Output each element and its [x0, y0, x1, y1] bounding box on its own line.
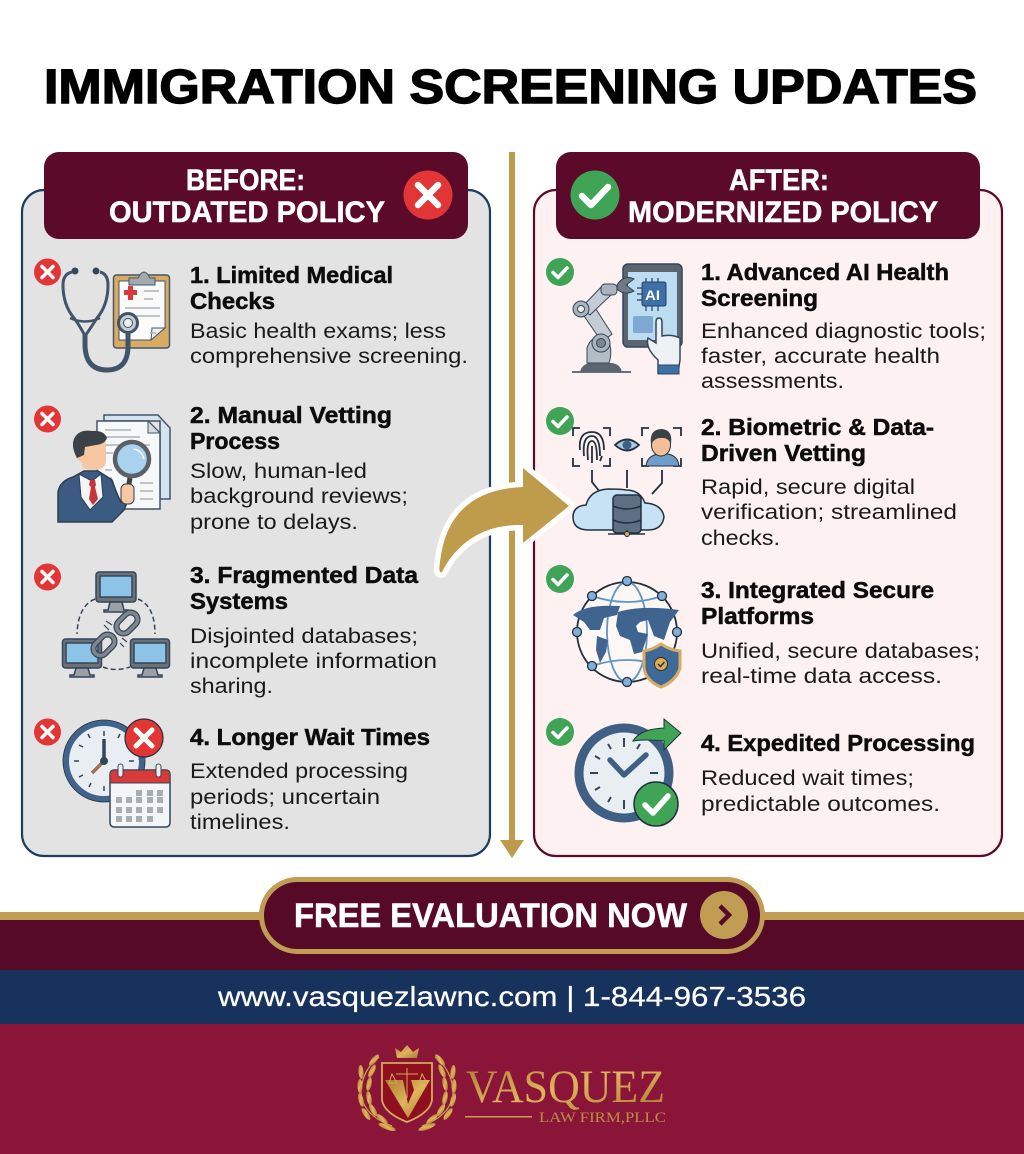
item 4: expedited processing [546, 718, 975, 826]
item 3: integrated secure platforms: real-time data access. [701, 664, 942, 688]
item 2: manual vetting process: 2. Manual Vetting [190, 402, 392, 428]
item 2: manual vetting process: prone to delays. [190, 510, 358, 534]
item 2: biometric and data-driven vetting: verification; streamlined [701, 500, 957, 524]
item 1: advanced ai health screening [546, 258, 986, 393]
item 3: fragmented data systems: sharing. [190, 674, 273, 698]
item 3: integrated secure platforms: Unified, secure databases; [701, 639, 980, 663]
item 3: fragmented data systems: incomplete information [190, 649, 437, 673]
item 4: expedited processing: predictable outcomes. [701, 792, 940, 816]
arrow: curved gold transition arrow [439, 468, 569, 572]
before header banner [44, 152, 468, 239]
item 1: limited medical checks: comprehensive screening. [190, 344, 468, 368]
after header banner [556, 152, 980, 239]
item 1: advanced ai health screening: Screening [701, 285, 818, 311]
item 1: advanced ai health screening: Enhanced diagnostic tools; [701, 319, 986, 343]
item 4: longer wait times: Extended processing [190, 759, 408, 783]
icon: disconnected computers and broken link [62, 572, 170, 677]
item 3: integrated secure platforms: 3. Integrated Secure [701, 577, 934, 603]
item 2: biometric and data-driven vetting: checks. [701, 526, 780, 550]
logo: vasquez law firm: VASQUEZ [466, 1061, 665, 1113]
before header banner: BEFORE: [186, 164, 305, 197]
item 1: limited medical checks: Checks [190, 288, 275, 314]
item 4: longer wait times [34, 718, 430, 834]
item 2: manual vetting process: Process [190, 428, 280, 454]
item 2: biometric and data-driven vetting: 2. Biometric & Data- [701, 414, 934, 440]
check badge [546, 718, 574, 746]
item 1: advanced ai health screening: 1. Advanced AI Health [701, 259, 949, 285]
item 3: fragmented data systems [34, 562, 437, 698]
check badge [546, 407, 574, 435]
contact bar [0, 970, 1024, 1024]
item 1: advanced ai health screening: faster, accurate health [701, 344, 940, 368]
item 3: fragmented data systems: Systems [190, 588, 288, 614]
icon: robot arm with ai tablet [572, 264, 682, 374]
item 2: biometric and data-driven vetting: Rapid, secure digital [701, 475, 915, 499]
x badge [34, 258, 61, 286]
item 3: fragmented data systems: 3. Fragmented Data [190, 562, 418, 588]
item 4: longer wait times: 4. Longer Wait Times [190, 724, 430, 750]
button: free evaluation now: FREE EVALUATION NOW [294, 897, 688, 935]
item 4: expedited processing: 4. Expedited Processing [701, 730, 975, 756]
item 1: limited medical checks [34, 258, 468, 370]
icon: fingerprint, eye, face and cloud database [573, 428, 681, 537]
icon: clock with arrow and check [579, 719, 681, 826]
item 3: integrated secure platforms: Platforms [701, 603, 814, 629]
x badge [34, 718, 61, 746]
footer background [0, 1024, 1024, 1154]
item 2: biometric and data-driven vetting [546, 407, 957, 550]
item 2: biometric and data-driven vetting: Driven Vetting [701, 440, 866, 466]
before header banner: OUTDATED POLICY [109, 196, 385, 229]
panel: after, modernized policy [534, 152, 1002, 856]
logo: vasquez law firm [357, 1045, 666, 1132]
x badge [34, 564, 61, 590]
x badge [34, 406, 61, 432]
item 1: limited medical checks: Basic health exams; less [190, 319, 446, 343]
item 1: limited medical checks: 1. Limited Medical [190, 262, 393, 288]
logo emblem: crown, wreath and shield [357, 1045, 457, 1132]
item 4: longer wait times: timelines. [190, 810, 290, 834]
item 4: longer wait times: periods; uncertain [190, 785, 380, 809]
icon: globe network and shield [572, 576, 682, 687]
icon: clock with calendar and x [63, 719, 170, 827]
item 1: advanced ai health screening: assessments. [701, 369, 844, 393]
item 2: manual vetting process: Slow, human-led [190, 459, 367, 483]
item 3: integrated secure platforms [546, 565, 980, 688]
item 4: expedited processing: Reduced wait times; [701, 766, 914, 790]
check badge [546, 565, 574, 593]
item 2: manual vetting process: background reviews; [190, 484, 408, 508]
item 2: manual vetting process [34, 402, 408, 534]
logo: vasquez law firm: LAW FIRM,PLLC [539, 1110, 666, 1126]
check badge [546, 258, 574, 286]
button: free evaluation now [262, 880, 762, 952]
contact bar: www.vasquezlawnc.com | 1-844-967-3536 [217, 981, 806, 1012]
footer band: burgundy strip with gold rule [0, 912, 1024, 970]
icon: man inspecting documents [58, 415, 170, 522]
panel: before, outdated policy [22, 152, 490, 856]
after header banner: AFTER: [729, 164, 829, 197]
title: IMMIGRATION SCREENING UPDATES [44, 61, 977, 114]
icon: stethoscope and clipboard [63, 268, 170, 370]
after header banner: MODERNIZED POLICY [628, 196, 938, 229]
icon: robot arm with ai tablet: AI [645, 287, 660, 303]
divider arrow: vertical gold line pointing down [500, 152, 524, 858]
item 3: fragmented data systems: Disjointed databases; [190, 624, 418, 648]
